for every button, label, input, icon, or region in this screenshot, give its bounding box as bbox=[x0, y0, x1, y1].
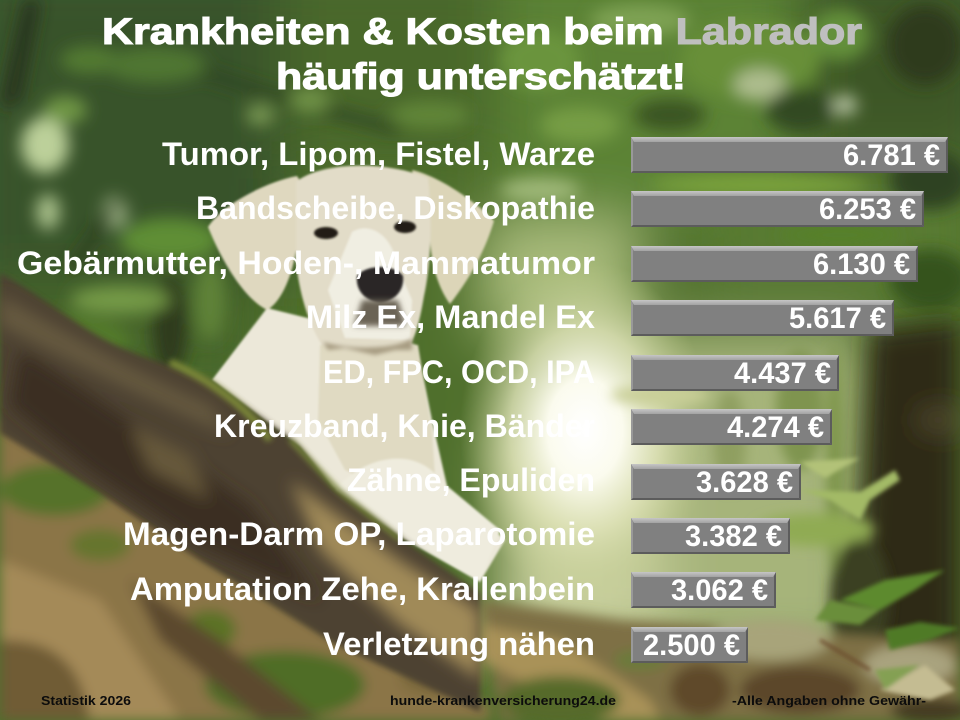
label: ED: ED, FPC, OCD, IPA bbox=[323, 354, 595, 390]
bar: 6.253 bbox=[631, 191, 924, 227]
background: light foliage bbox=[610, 345, 890, 660]
title bbox=[102, 11, 862, 97]
background: sun glow bbox=[460, 260, 710, 600]
bar: 2.500: 2.500 € bbox=[643, 629, 740, 662]
label: Magen-Darm: Magen-Darm OP, Laparotomie bbox=[123, 516, 595, 552]
background: foliage blotches bbox=[0, 0, 960, 375]
ground left bbox=[0, 420, 490, 720]
category labels bbox=[17, 136, 595, 662]
label: Zähne: Zähne, Epuliden bbox=[347, 462, 595, 498]
background: tree trunk right bbox=[855, 320, 960, 660]
footer: disclaimer: -Alle Angaben ohne Gewähr- bbox=[732, 693, 926, 708]
label: Tumor: Tumor, Lipom, Fistel, Warze bbox=[162, 136, 595, 172]
label: Gebärmutter: Gebärmutter, Hoden-, Mammatumor bbox=[17, 245, 595, 281]
label: Kreuzband: Kreuzband, Knie, Bänder bbox=[214, 408, 595, 444]
log trunk bbox=[0, 273, 480, 712]
bar: 3.062 bbox=[631, 572, 776, 608]
dog: white labrador puppy bbox=[208, 166, 505, 582]
bar: 6.781: 6.781 € bbox=[843, 139, 940, 172]
dog head bbox=[296, 166, 431, 350]
dog jowls bbox=[323, 338, 412, 355]
dog nose bbox=[357, 267, 403, 303]
title line 2: häufig unterschätzt! bbox=[276, 56, 686, 97]
label: Amputation: Amputation Zehe, Krallenbein bbox=[130, 571, 595, 607]
log moss edge bbox=[170, 362, 270, 440]
dog ear left bbox=[208, 176, 306, 310]
bar: 3.382 bbox=[631, 518, 790, 554]
background: ground right bbox=[480, 600, 960, 720]
label: Milz: Milz Ex, Mandel Ex bbox=[306, 299, 595, 335]
footer bbox=[41, 693, 926, 708]
bar: 4.274 bbox=[631, 409, 832, 445]
log bbox=[0, 273, 480, 712]
bar: 6.130: 6.130 € bbox=[813, 248, 910, 281]
bar: 5.617: 5.617 € bbox=[789, 302, 886, 335]
bar chart bbox=[631, 137, 948, 663]
bar: 5.617 bbox=[631, 300, 894, 336]
bar: 4.274: 4.274 € bbox=[727, 411, 824, 444]
bar: 3.062: 3.062 € bbox=[671, 574, 768, 607]
bar: 4.437: 4.437 € bbox=[734, 357, 831, 390]
footer: Statistik: Statistik 2026 bbox=[41, 693, 131, 708]
bar: 3.628: 3.628 € bbox=[696, 466, 793, 499]
label: Verletzung: Verletzung nähen bbox=[323, 626, 595, 662]
dog body bbox=[212, 308, 505, 582]
dog eyes bbox=[314, 227, 338, 239]
bar: 3.628 bbox=[631, 464, 801, 500]
bar: 3.382: 3.382 € bbox=[685, 520, 782, 553]
bar: 6.781 bbox=[631, 137, 948, 173]
dog ear right bbox=[412, 170, 494, 304]
title line 1: Krankheiten & Kosten beim Labrador bbox=[102, 11, 862, 52]
bar: 6.253: 6.253 € bbox=[819, 193, 916, 226]
bar: 4.437 bbox=[631, 355, 839, 391]
label: Bandscheibe: Bandscheibe, Diskopathie bbox=[196, 190, 595, 226]
bar: 6.130 bbox=[631, 246, 918, 282]
leaves right bbox=[800, 458, 960, 700]
footer: website: hunde-krankenversicherung24.de bbox=[390, 693, 616, 708]
